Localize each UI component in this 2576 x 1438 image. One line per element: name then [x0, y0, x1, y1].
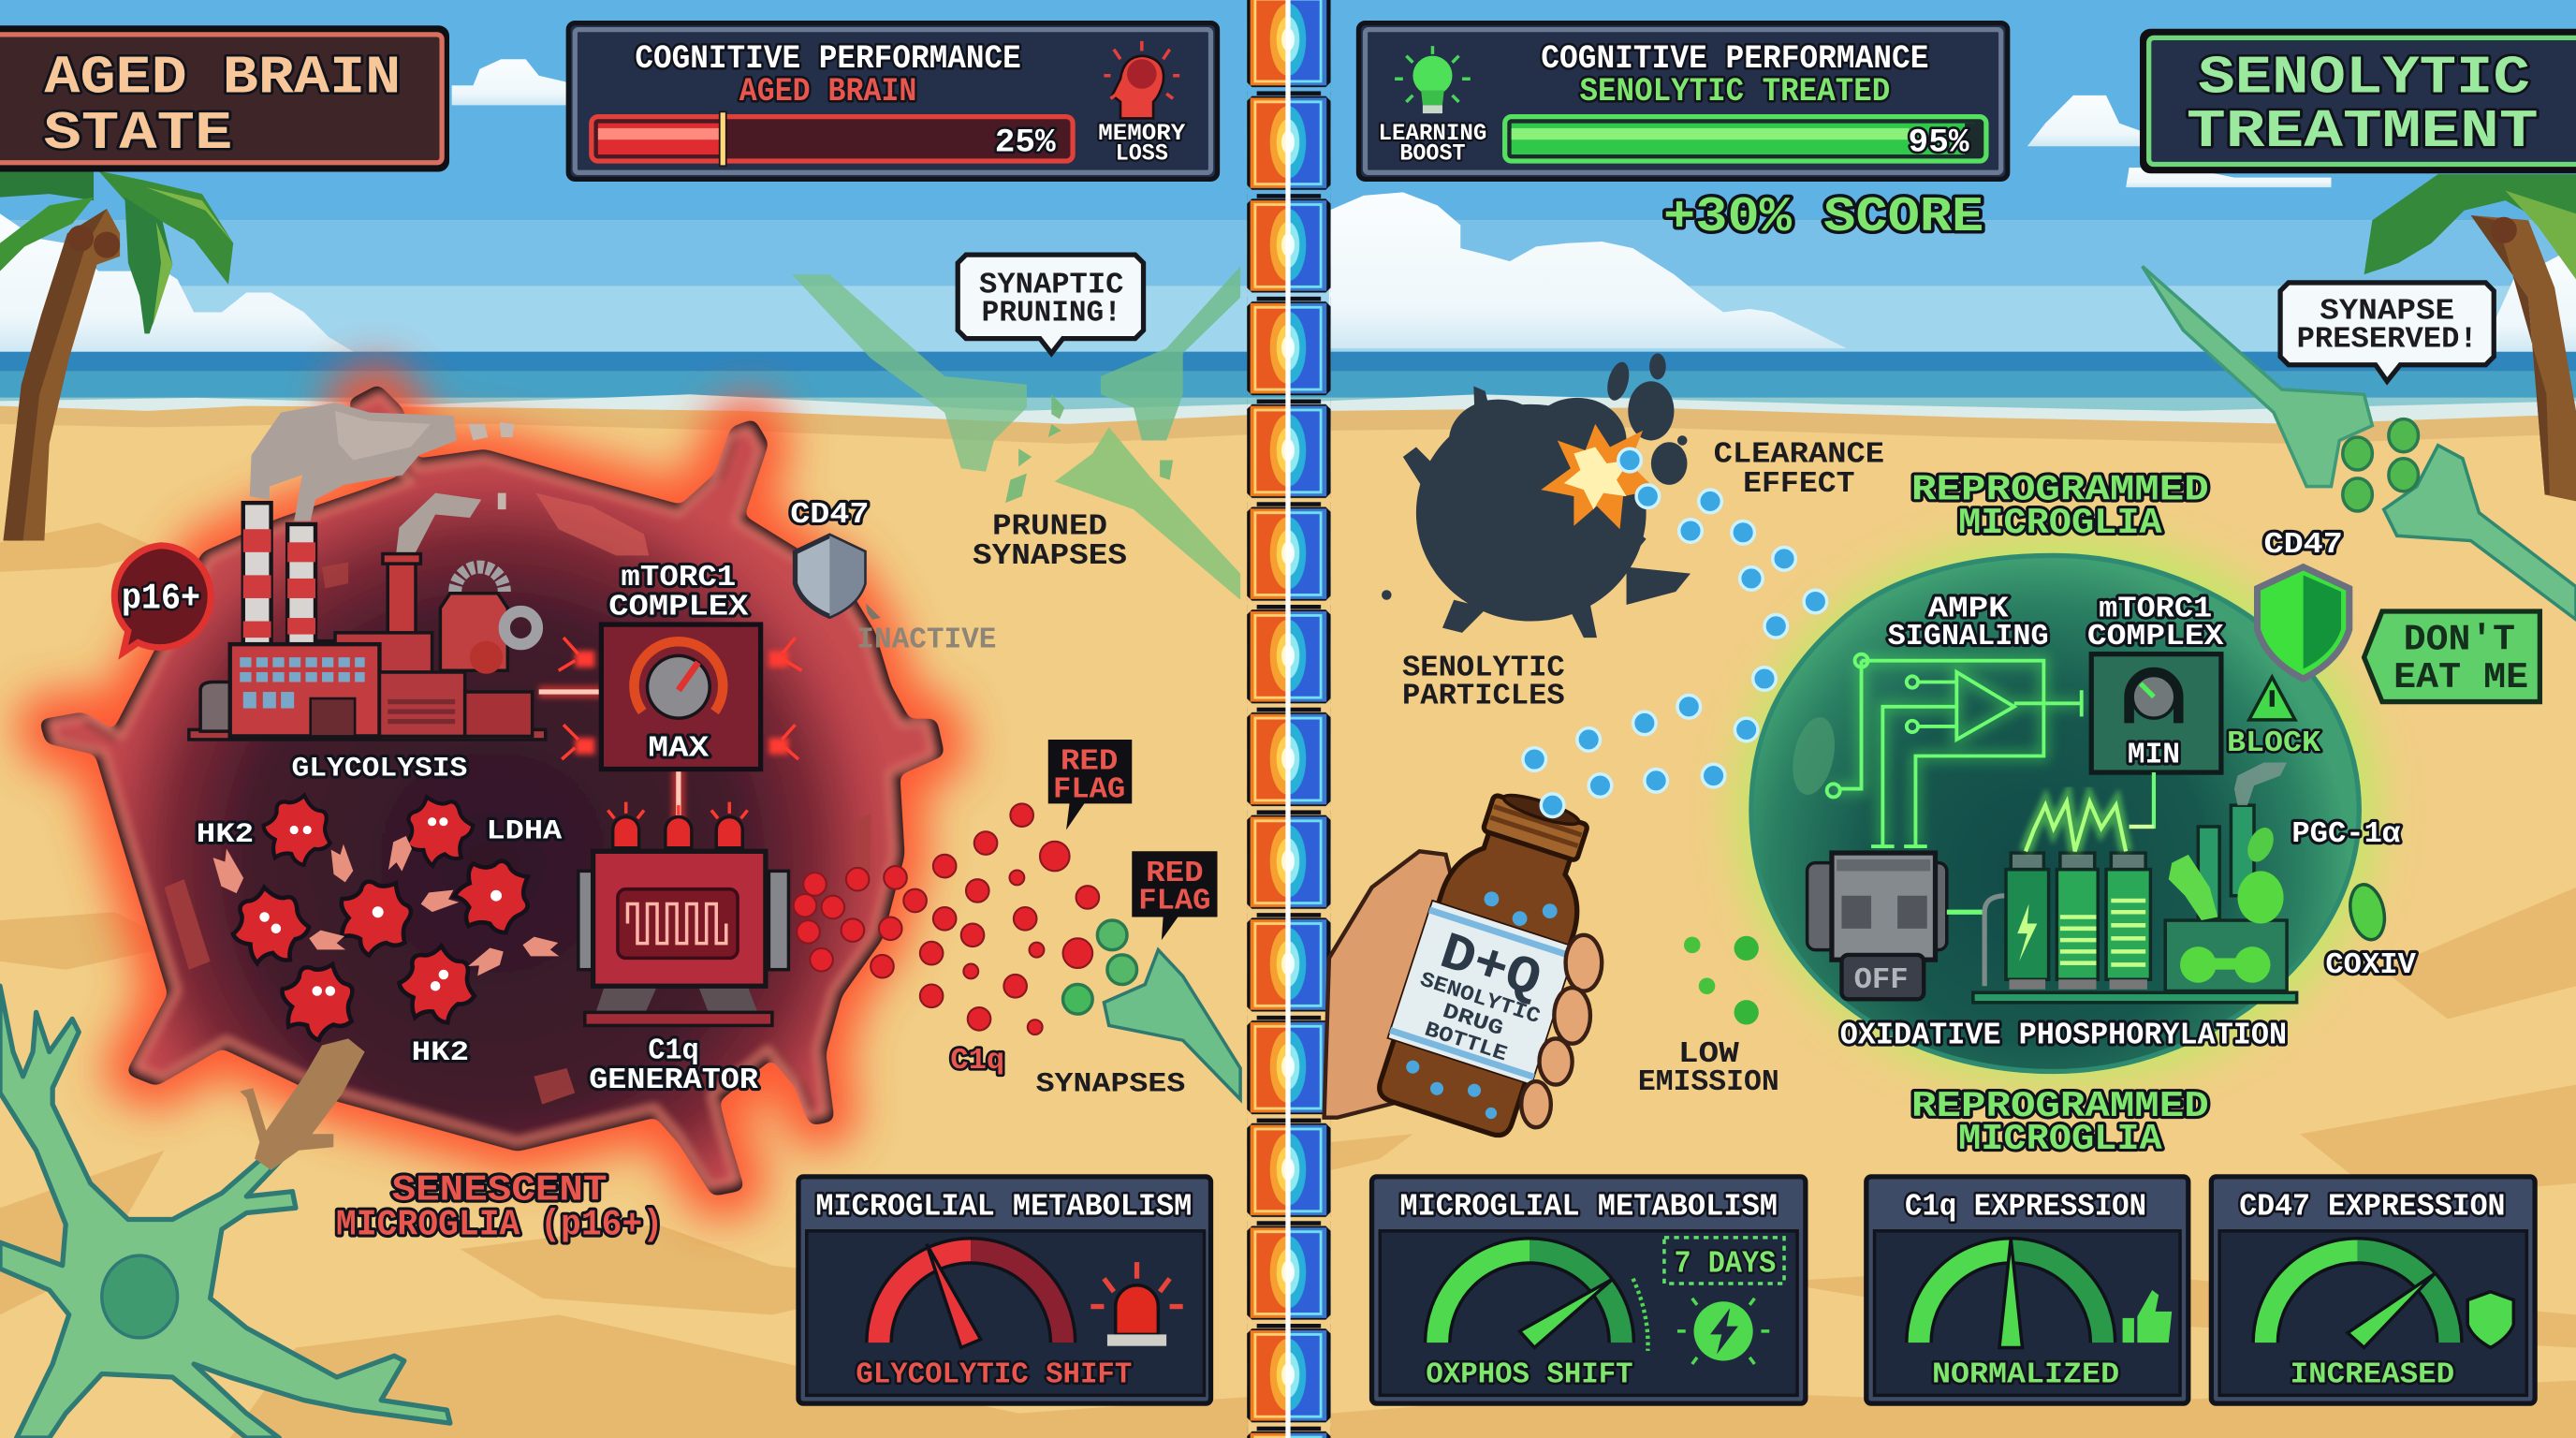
reprogrammed microglia cell — [1734, 535, 2378, 1086]
neuron — [0, 986, 450, 1438]
title: senolytic treatment: TREATMENT — [2187, 102, 2539, 163]
label: pruned synapses: PRUNED — [992, 511, 1107, 544]
callout: don't eat me — [2364, 611, 2539, 702]
label: mTORC1 complex treated — [2087, 593, 2224, 653]
panel: cognitive performance treated — [1358, 23, 2008, 179]
panel: microglial metabolism treated: MICROGLIAL METABOLISM — [1399, 1189, 1778, 1225]
label: AMPK signaling: SIGNALING — [1888, 621, 2049, 653]
labels: enzymes: LDHA — [487, 814, 562, 846]
C1q particles — [794, 803, 1099, 1034]
label: memory loss — [1098, 122, 1186, 167]
bar: 95 percent: 95% — [1909, 124, 1969, 162]
icon: CD47 active shield: CD47 — [2264, 529, 2343, 562]
label: memory loss: MEMORY — [1098, 122, 1186, 147]
labels: oxphos: OXIDATIVE PHOSPHORYLATION — [1840, 1019, 2287, 1054]
panel: CD47 expression: CD47 EXPRESSION — [2239, 1189, 2506, 1225]
badge: p16+ — [114, 546, 211, 653]
block warning — [2227, 677, 2320, 760]
icon: learning boost bulb — [1395, 46, 1471, 113]
low emission particles and label — [1638, 936, 1779, 1099]
label: reprogrammed microglia top — [1911, 470, 2209, 544]
label: senescent microglia: SENESCENT — [392, 1169, 607, 1211]
hand holding bottle: palm — [1325, 851, 1486, 1118]
label: C1q generator — [589, 1034, 758, 1097]
callouts: red flags: RED — [1146, 858, 1204, 890]
bar: 25 percent — [592, 111, 1073, 166]
labels: C1q and synapses — [950, 1045, 1185, 1100]
panel: microglial metabolism treated — [1372, 1177, 1806, 1403]
clouds — [0, 59, 2576, 352]
label: mTORC1 complex: mTORC1 — [621, 562, 736, 594]
senescent microglia cell — [44, 389, 940, 1192]
C1q generator — [578, 802, 788, 1097]
speech bubble: synapse preserved — [2280, 283, 2494, 381]
speech bubble: synaptic pruning: PRUNING! — [982, 297, 1121, 330]
connector: glycolysis to mTORC1 — [539, 692, 679, 825]
callout: don't eat me: EAT ME — [2393, 657, 2528, 698]
labels: enzymes — [197, 814, 562, 1068]
panel: cognitive performance aged — [568, 23, 1218, 179]
panel: cognitive performance aged: AGED BRAIN — [739, 73, 916, 110]
label: reprogrammed microglia top: REPROGRAMMED — [1911, 470, 2209, 511]
icon: CD47 active shield — [2258, 529, 2349, 679]
labels: clearance and particles: PARTICLES — [1402, 680, 1565, 712]
labels: C1q and synapses: SYNAPSES — [1036, 1068, 1185, 1100]
label: reprogrammed microglia bottom: REPROGRAMMED — [1911, 1086, 2209, 1127]
title: aged brain state: AGED BRAIN — [44, 48, 401, 109]
labels: C1q and synapses: C1q — [950, 1045, 1004, 1078]
title: aged brain state — [0, 30, 446, 168]
panel: cognitive performance treated: COGNITIVE PERFORMANCE — [1541, 40, 1928, 78]
speech bubble: synaptic pruning: SYNAPTIC — [979, 269, 1124, 301]
mTORC1 max complex — [559, 562, 801, 770]
panel: microglial metabolism aged: MICROGLIAL METABOLISM — [815, 1189, 1192, 1225]
panel: C1q expression: C1q EXPRESSION — [1905, 1189, 2146, 1225]
panel: C1q expression — [1866, 1177, 2188, 1403]
panel: CD47 expression: INCREASED — [2291, 1358, 2454, 1391]
label: pruned synapses: SYNAPSES — [973, 540, 1127, 573]
enzymes: HK2 and LDHA molecules — [210, 785, 562, 1052]
oxidative phosphorylation machinery — [1947, 763, 2389, 1003]
speech bubble: synapse preserved: PRESERVED! — [2297, 323, 2478, 356]
title: aged brain state: STATE — [44, 104, 232, 165]
bar: 25 percent: 25% — [995, 124, 1057, 162]
mTORC1 min complex — [2087, 593, 2224, 827]
gauge: increased — [2265, 1251, 2450, 1347]
label: learning boost: LEARNING — [1379, 122, 1486, 147]
labels: clearance and particles — [1402, 438, 1884, 712]
smoke plumes — [250, 403, 514, 555]
label: C1q generator: GENERATOR — [589, 1064, 758, 1097]
label: reprogrammed microglia top: MICROGLIA — [1958, 503, 2163, 544]
OFF device: OFF — [1854, 964, 1909, 997]
callouts: red flags — [1048, 740, 1218, 940]
label: pruned synapses — [973, 511, 1127, 573]
panel: microglial metabolism treated: OXPHOS SHIFT — [1426, 1358, 1633, 1391]
labels: enzymes: HK2 — [197, 818, 254, 850]
callout: don't eat me: DON'T — [2404, 619, 2515, 660]
labels: clearance and particles: SENOLYTIC — [1402, 652, 1565, 684]
label: memory loss: LOSS — [1116, 141, 1168, 167]
icon: small shield — [2467, 1292, 2513, 1347]
speech bubble: synapse preserved: SYNAPSE — [2320, 296, 2454, 329]
badge: p16+: p16+ — [122, 579, 200, 620]
label: senescent microglia: MICROGLIA (p16+) — [336, 1204, 663, 1245]
hand holding bottle: fingers — [1521, 935, 1602, 1127]
callouts: red flags: FLAG — [1053, 773, 1125, 806]
gauge: oxphos shift — [1438, 1251, 1648, 1351]
drug bottle D+Q — [1369, 779, 1616, 1141]
bottle label: D+Q — [1432, 922, 1548, 1011]
labels: clearance and particles: EFFECT — [1743, 468, 1855, 501]
labels: oxphos: PGC-1α — [2291, 818, 2400, 851]
icon: memory loss head — [1104, 41, 1179, 118]
label: C1q generator: C1q — [648, 1034, 699, 1067]
label: learning boost: BOOST — [1399, 141, 1466, 167]
mTORC1 max complex: MAX — [648, 732, 709, 765]
panel: cognitive performance treated: SENOLYTIC TREATED — [1580, 73, 1890, 110]
label: glycolysis: GLYCOLYSIS — [292, 753, 467, 785]
block warning: BLOCK — [2227, 727, 2320, 760]
panel: microglial metabolism aged — [798, 1177, 1211, 1403]
bottle label: SENOLYTIC — [1417, 967, 1544, 1029]
icon: CD47 inactive shield — [790, 499, 996, 657]
left palm tree — [0, 171, 233, 541]
right palm tree — [2364, 174, 2576, 501]
labels: enzymes: HK2 — [412, 1036, 469, 1068]
icon: thumbs up — [2123, 1290, 2172, 1343]
labels: clearance and particles: CLEARANCE — [1714, 438, 1884, 471]
preserved synapse — [2143, 266, 2576, 620]
low emission particles and label: LOW — [1678, 1038, 1739, 1071]
senolytic blue particles — [1523, 448, 1827, 816]
OFF device — [1808, 853, 1947, 999]
AMPK signaling circuit — [1827, 593, 2082, 846]
speech bubble: synaptic pruning — [958, 255, 1144, 353]
icon: glycolysis factory — [189, 503, 546, 740]
synapse: healthy left bottom — [1063, 920, 1240, 1099]
label: learning boost — [1379, 122, 1486, 167]
gauge: glycolytic shift — [879, 1244, 1063, 1347]
icon: energy bolt — [1677, 1299, 1769, 1364]
title: senolytic treatment: SENOLYTIC — [2198, 48, 2530, 109]
badge: 7 days — [1664, 1238, 1784, 1284]
panel: C1q expression: NORMALIZED — [1932, 1358, 2119, 1391]
icon: CD47 inactive shield: CD47 — [790, 499, 869, 532]
label: AMPK signaling — [1888, 593, 2049, 653]
gauge: normalized — [1919, 1240, 2103, 1347]
label: mTORC1 complex — [608, 562, 748, 624]
central divider: fire and ice chain — [1247, 0, 1331, 1438]
pruned synapses — [792, 266, 1240, 600]
label: mTORC1 complex treated: mTORC1 — [2099, 593, 2212, 625]
senolytic splat with explosion — [1382, 353, 1690, 638]
label: mTORC1 complex treated: COMPLEX — [2087, 621, 2224, 653]
panel: CD47 expression — [2211, 1177, 2535, 1403]
labels: oxphos: COXIV — [2325, 949, 2416, 982]
low emission particles and label: EMISSION — [1638, 1066, 1779, 1099]
callouts: red flags: RED — [1061, 746, 1118, 779]
panel: cognitive performance aged: COGNITIVE PERFORMANCE — [635, 40, 1021, 78]
labels: oxphos — [1840, 818, 2416, 1054]
label: reprogrammed microglia bottom — [1911, 1086, 2209, 1160]
label: senescent microglia — [336, 1169, 663, 1245]
icon: siren — [1090, 1262, 1183, 1346]
label: mTORC1 complex: COMPLEX — [608, 592, 748, 624]
label: inactive: INACTIVE — [856, 624, 996, 657]
bottle label: BOTTLE — [1422, 1018, 1510, 1066]
panel: microglial metabolism aged: GLYCOLYTIC SHIFT — [856, 1358, 1132, 1391]
score: plus 30 percent: +30% SCORE — [1663, 189, 1983, 245]
label: AMPK signaling: AMPK — [1928, 593, 2009, 625]
mTORC1 min complex: MIN — [2128, 740, 2180, 772]
badge: 7 days: 7 DAYS — [1674, 1247, 1776, 1283]
bottle label: DRUG — [1440, 999, 1506, 1041]
callouts: red flags: FLAG — [1138, 886, 1211, 918]
bottle label — [1387, 901, 1576, 1085]
label: reprogrammed microglia bottom: MICROGLIA — [1958, 1119, 2163, 1160]
green factory — [2165, 763, 2287, 991]
bar: 95 percent — [1505, 117, 1986, 162]
title: senolytic treatment — [2144, 33, 2576, 169]
